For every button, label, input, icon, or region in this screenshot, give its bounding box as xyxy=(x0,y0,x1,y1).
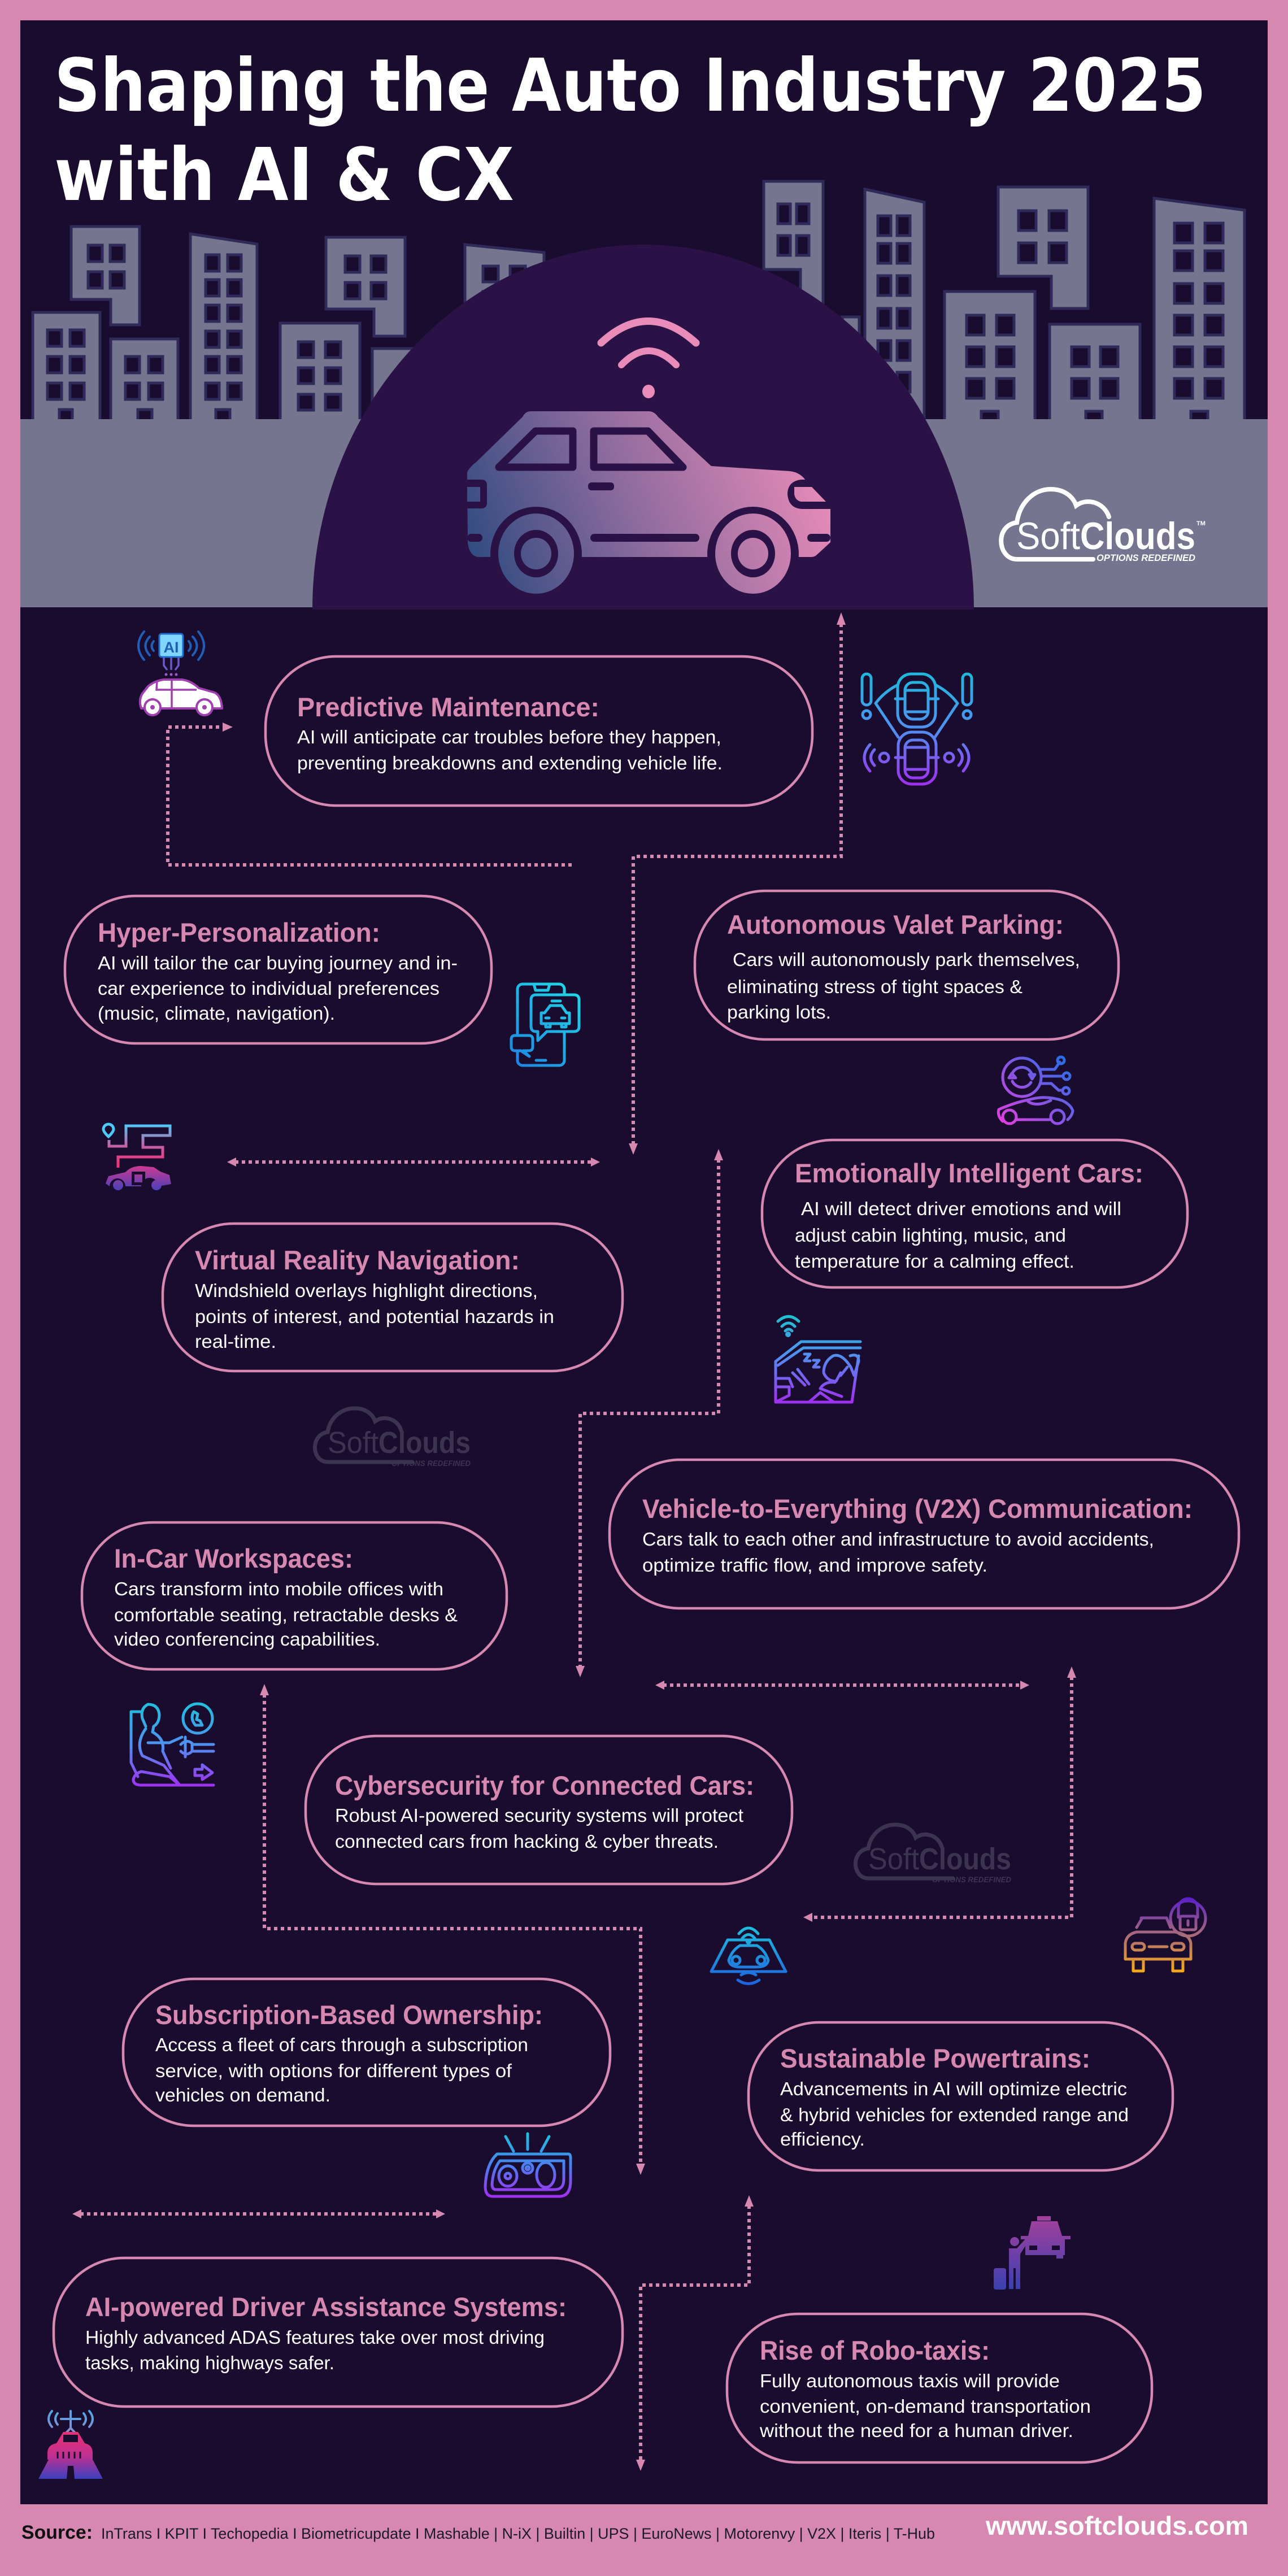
logo: SoftClouds watermark 2: Clouds xyxy=(919,1842,1011,1876)
panel: Predictive Maintenance: preventing breakdowns and extending vehicle life. xyxy=(297,752,723,773)
icon: central car xyxy=(467,411,830,602)
panel: Subscription-Based Ownership: Access a fleet of cars through a subscription xyxy=(155,2034,528,2055)
panel: In-Car Workspaces: comfortable seating, retractable desks & xyxy=(114,1604,458,1625)
panel: Sustainable Powertrains xyxy=(749,2022,1173,2170)
icon: AI chip above car xyxy=(138,632,222,715)
panel: Cybersecurity for Connected Cars xyxy=(306,1736,792,1884)
panel: In-Car Workspaces xyxy=(82,1522,507,1669)
panel: Virtual Reality Navigation xyxy=(163,1224,623,1371)
panel: Predictive Maintenance: AI will anticipate car troubles before they happen, xyxy=(297,726,721,747)
logo: SoftClouds watermark 1: OPTIONS REDEFINED xyxy=(391,1459,471,1468)
panel: Predictive Maintenance: Predictive Maintenance: xyxy=(297,692,599,722)
panel: Rise of Robo-taxis: Rise of Robo-taxis: xyxy=(760,2335,990,2365)
panel: Emotionally Intelligent Cars: temperature for a calming effect. xyxy=(795,1251,1074,1272)
panel: Predictive Maintenance xyxy=(266,656,812,806)
logo: SoftClouds watermark 1: Clouds xyxy=(378,1426,471,1460)
logo: SoftClouds watermark 1: Soft xyxy=(328,1426,378,1460)
panel: V2X Communication: Vehicle-to-Everything (V2X) Communication: xyxy=(642,1494,1193,1524)
panel: Cybersecurity for Connected Cars: connected cars from hacking & cyber threats. xyxy=(335,1831,719,1852)
icon: parking sensors xyxy=(862,674,972,784)
panel: Rise of Robo-taxis: convenient, on-demand transportation xyxy=(760,2396,1091,2417)
title: with AI & CX xyxy=(54,133,514,217)
road / ground band xyxy=(20,419,1268,607)
panel: AI-powered Driver Assistance Systems: Highly advanced ADAS features take over most driving xyxy=(85,2327,545,2348)
logo: SoftClouds white: OPTIONS REDEFINED xyxy=(1096,552,1195,563)
panel: In-Car Workspaces: Cars transform into mobile offices with xyxy=(114,1578,443,1599)
panel: AI-powered Driver Assistance Systems: AI-powered Driver Assistance Systems: xyxy=(85,2292,567,2322)
website url: www.softclouds.com xyxy=(985,2511,1248,2540)
logo: SoftClouds white xyxy=(1001,489,1206,563)
panel: V2X Communication: Cars talk to each other and infrastructure to avoid accidents, xyxy=(642,1529,1154,1550)
panel: Autonomous Valet Parking: eliminating stress of tight spaces & xyxy=(727,976,1022,997)
panel: Hyper-Personalization xyxy=(65,896,491,1043)
panel: Emotionally Intelligent Cars: adjust cabin lighting, music, and xyxy=(795,1225,1066,1246)
arrow: up from V2X side xyxy=(576,1149,723,1677)
panel: Subscription-Based Ownership: service, with options for different types of xyxy=(155,2060,512,2081)
arrow: double horizontal 1 xyxy=(227,1158,600,1167)
panel: Virtual Reality Navigation: Windshield overlays highlight directions, xyxy=(195,1280,538,1301)
panel: Emotionally Intelligent Cars xyxy=(762,1140,1187,1287)
title xyxy=(54,43,1206,217)
arrow: left connector xyxy=(260,1684,645,2175)
panel: Autonomous Valet Parking xyxy=(695,891,1119,1039)
panel: In-Car Workspaces: In-Car Workspaces: xyxy=(114,1543,353,1573)
panel: Hyper-Personalization: car experience to individual preferences xyxy=(98,978,440,999)
panel: Cybersecurity for Connected Cars: Robust AI-powered security systems will protect xyxy=(335,1805,743,1826)
panel: AI-powered Driver Assistance Systems xyxy=(54,2258,623,2407)
logo: SoftClouds white: Soft xyxy=(1016,515,1080,558)
panel: Subscription-Based Ownership: vehicles on demand. xyxy=(155,2085,330,2105)
panel: Rise of Robo-taxis: Fully autonomous taxis will provide xyxy=(760,2370,1060,2391)
panel: Virtual Reality Navigation: points of interest, and potential hazards in xyxy=(195,1306,554,1327)
icon: route with car chip xyxy=(103,1124,171,1190)
panel: Virtual Reality Navigation: Virtual Reality Navigation: xyxy=(195,1245,520,1275)
panel: Emotionally Intelligent Cars: AI will detect driver emotions and will xyxy=(801,1198,1121,1219)
city skyline: left buildings xyxy=(33,227,544,421)
icon: AI chip above car: AI xyxy=(164,639,179,656)
source line: InTrans I KPIT I Techopedia I Biometricupdate I Mashable | N-iX | Builtin | UPS | EuroNews | Motorenvy | V2X | Iteris | T-Hub xyxy=(101,2525,935,2542)
arrow: loop to predictive maintenance xyxy=(168,723,572,865)
arrow: double horizontal 2 xyxy=(655,1681,1029,1690)
city skyline: right buildings xyxy=(764,181,1245,421)
panel: V2X Communication xyxy=(610,1460,1239,1608)
panel: AI-powered Driver Assistance Systems: tasks, making highways safer. xyxy=(85,2352,334,2373)
logo: SoftClouds watermark 2 xyxy=(855,1825,1011,1884)
panel: Hyper-Personalization: Hyper-Personalization: xyxy=(98,917,380,947)
logo: SoftClouds watermark 1 xyxy=(315,1408,471,1468)
panel: Hyper-Personalization: (music, climate, navigation). xyxy=(98,1003,335,1024)
logo: SoftClouds white: Clouds xyxy=(1080,515,1195,558)
panel: Subscription-Based Ownership: Subscription-Based Ownership: xyxy=(155,2000,543,2030)
panel: V2X Communication: optimize traffic flow, and improve safety. xyxy=(642,1555,987,1576)
source line: Source: xyxy=(21,2522,93,2543)
icon: in-car workspace xyxy=(131,1704,214,1785)
arrow: bottom connector xyxy=(636,2195,754,2471)
panel: Sustainable Powertrains: Advancements in AI will optimize electric xyxy=(780,2078,1127,2099)
icon: wifi signal above car xyxy=(601,321,696,398)
logo: SoftClouds watermark 2: OPTIONS REDEFINED xyxy=(932,1875,1011,1884)
panel: Rise of Robo-taxis: without the need for a human driver. xyxy=(759,2420,1073,2441)
icon: emotion circuit car xyxy=(998,1057,1073,1124)
central dome xyxy=(312,245,974,610)
logo: SoftClouds watermark 2: Soft xyxy=(868,1842,919,1876)
arrow: top connector from dome to centre xyxy=(629,612,846,1155)
arrow: right connector xyxy=(803,1666,1076,1922)
icon: robo taxi with passenger xyxy=(994,2216,1071,2290)
panel: Emotionally Intelligent Cars: Emotionally Intelligent Cars: xyxy=(795,1158,1143,1188)
icon: connected car on road xyxy=(711,1928,786,1984)
logo: SoftClouds white: TM xyxy=(1196,520,1206,527)
icon: phone taxi booking xyxy=(511,984,579,1065)
panel: Sustainable Powertrains: Sustainable Powertrains: xyxy=(780,2043,1090,2073)
icon: driver assistance on road xyxy=(38,2411,103,2479)
panel: Sustainable Powertrains: & hybrid vehicles for extended range and xyxy=(780,2104,1129,2125)
panel: Virtual Reality Navigation: real-time. xyxy=(195,1331,276,1352)
panel: Rise of Robo-taxis xyxy=(727,2314,1152,2462)
panel: Subscription-Based Ownership xyxy=(123,1979,610,2126)
icon: locked car xyxy=(1125,1899,1206,1971)
panel: Cybersecurity for Connected Cars: Cybersecurity for Connected Cars: xyxy=(335,1770,754,1800)
arrow: double horizontal 3 xyxy=(72,2209,445,2218)
panel: In-Car Workspaces: video conferencing capabilities. xyxy=(114,1629,380,1650)
icon: smart headlight xyxy=(485,2134,571,2196)
panel: Hyper-Personalization: AI will tailor the car buying journey and in- xyxy=(98,952,458,973)
panel: Autonomous Valet Parking: parking lots. xyxy=(727,1002,831,1022)
panel: Autonomous Valet Parking: Cars will autonomously park themselves, xyxy=(733,949,1080,970)
panel: Autonomous Valet Parking: Autonomous Valet Parking: xyxy=(727,910,1064,939)
panel: Sustainable Powertrains: efficiency. xyxy=(780,2129,865,2149)
icon: sleeping driver with wifi xyxy=(776,1316,860,1402)
